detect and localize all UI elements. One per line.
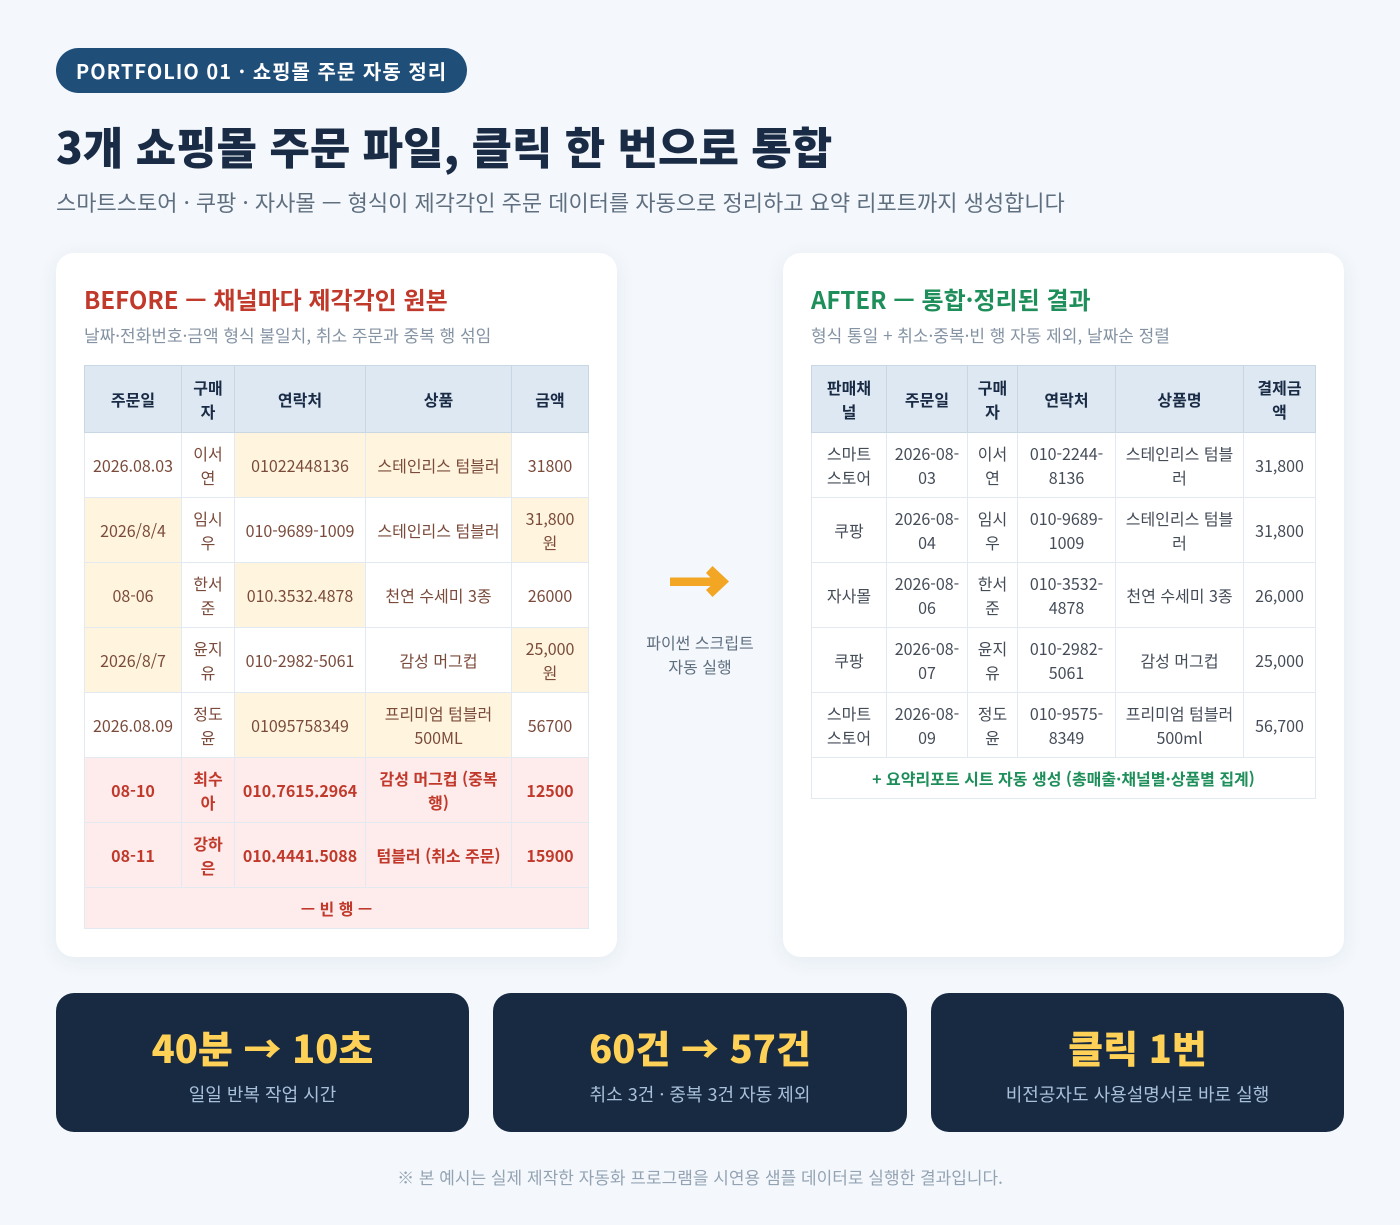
before table: 010-2982-5061 [246,648,354,672]
after table: 010-9575- [1030,701,1103,725]
after table: 상품명 [1157,387,1202,411]
panel: after [783,253,1344,957]
stat card: time [56,993,469,1132]
before table: 08-11 [111,843,155,867]
after table: 결제금 [1257,375,1302,399]
before table: 15900 [526,843,574,867]
before table: 010-9689-1009 [246,518,354,542]
after table: 스마트 [827,701,871,725]
after table: 2026-08- [895,506,959,530]
after table: 주문일 [905,387,949,411]
before table: 31,800 [526,506,574,530]
before table: 010.7615.2964 [243,778,357,802]
after table: 연락처 [1044,387,1089,411]
before table: 01095758349 [251,713,349,737]
after table: 06 [918,595,936,619]
before heading: BEFORE — 채널마다 제각각인 원본 [84,281,448,316]
badge: PORTFOLIO 01 · 쇼핑몰 주문 자동 정리 [76,56,447,85]
after description: 형식 통일 + 취소·중복·빈 행 자동 제외, 날짜순 정렬 [811,322,1170,347]
after table: 04 [918,530,936,554]
after table: 임시우 [978,506,1007,554]
after table: 구매자 [978,375,1007,423]
after table: 정도윤 [978,701,1007,749]
before table: 12500 [526,778,574,802]
badge [56,48,467,93]
before table [84,365,589,929]
before table: 한서준 [193,571,223,619]
before table: 2026.08.03 [93,453,173,477]
after table: 2026-08- [895,636,959,660]
after table: 스마트 [827,441,871,465]
before table: 상품 [424,387,453,411]
before table: 텀블러 (취소 주문) [376,843,501,867]
after table: 천연 수세미 3종 [1126,583,1233,607]
stat value: 60건 → 57건 [589,1019,811,1074]
after table: 56,700 [1255,713,1304,737]
after table: 자사몰 [827,583,871,607]
after table: 09 [918,725,936,749]
after table: 26,000 [1255,583,1304,607]
before table: 감성 머그컵 (중복 행) [379,766,498,814]
arrow caption: 자동 실행 [668,654,732,678]
after table: 감성 머그컵 [1140,648,1219,672]
before table: 천연 수세미 3종 [385,583,492,607]
after table: 2026-08- [895,571,959,595]
after table: 1009 [1049,530,1084,554]
before table: 010.4441.5088 [243,843,357,867]
before table: 스테인리스 텀블러 [377,518,500,542]
after table: 010-9689- [1030,506,1103,530]
before table: 2026/8/4 [100,518,166,542]
before table: 원 [543,530,557,554]
after table: 010-2244- [1030,441,1103,465]
before table: 임시우 [193,506,223,554]
before table: — 빈 행 — [301,896,372,920]
footnote: ※ 본 예시는 실제 제작한 자동화 프로그램을 시연용 샘플 데이터로 실행한 결과입니다. [397,1164,1003,1189]
after table: 8136 [1049,465,1084,489]
before table: 08-06 [112,583,154,607]
arrow caption [646,630,754,678]
before table: 2026/8/7 [100,648,166,672]
before table: 강하은 [193,831,223,879]
before table: 프리미엄 텀블러 500ML [385,701,492,749]
before description: 날짜·전화번호·금액 형식 불일치, 취소 주문과 중복 행 섞임 [84,322,491,347]
after table: 31,800 [1255,518,1304,542]
after table: 판매채 [827,375,871,399]
after table: 스토어 [827,725,871,749]
stat label: 비전공자도 사용설명서로 바로 실행 [1006,1081,1269,1107]
after table: 07 [918,660,936,684]
before table: 56700 [528,713,572,737]
before table: 25,000 [526,636,574,660]
after table: 스토어 [827,465,871,489]
before table: 08-10 [111,778,155,802]
stat value: 40분 → 10초 [152,1019,373,1074]
after table: 쿠팡 [834,518,864,542]
after table: 010-2982- [1030,636,1103,660]
after table: 스테인리스 텀블러 [1126,506,1233,554]
after table: 03 [918,465,936,489]
before table: 윤지유 [193,636,223,684]
stat label: 취소 3건 · 중복 3건 자동 제외 [590,1081,810,1107]
before table: 구매자 [193,375,223,423]
stat card: click [931,993,1344,1132]
title: 3개 쇼핑몰 주문 파일, 클릭 한 번으로 통합 [56,113,832,177]
before table: 스테인리스 텀블러 [377,453,500,477]
before table: 01022448136 [251,453,349,477]
after table: 한서준 [978,571,1007,619]
after table: 25,000 [1255,648,1304,672]
before table: 2026.08.09 [93,713,173,737]
before table: 최수아 [193,766,223,814]
before table: 26000 [528,583,572,607]
after table: 8349 [1049,725,1084,749]
stat card: rows [493,993,907,1132]
arrow [670,566,729,597]
after table: + 요약리포트 시트 자동 생성 (총매출·채널별·상품별 집계) [872,766,1255,790]
before table: 이서연 [193,441,223,489]
after table: 이서연 [978,441,1007,489]
after table: 31,800 [1255,453,1304,477]
before table: 31800 [528,453,572,477]
after table: 4878 [1049,595,1084,619]
after table: 프리미엄 텀블러 500ml [1126,701,1233,749]
before table: 연락처 [278,387,322,411]
before table: 주문일 [111,387,155,411]
after table: 액 [1272,399,1287,423]
panel: before [56,253,617,957]
before table: 010.3532.4878 [247,583,353,607]
stat value: 클릭 1번 [1068,1019,1207,1074]
after table: 2026-08- [895,441,959,465]
after heading: AFTER — 통합·정리된 결과 [811,281,1091,316]
arrow caption: 파이썬 스크립트 [646,630,754,654]
after table: 010-3532- [1030,571,1103,595]
stat label: 일일 반복 작업 시간 [189,1081,336,1107]
after table: 윤지유 [978,636,1007,684]
after table: 2026-08- [895,701,959,725]
after table [811,365,1316,799]
after table: 쿠팡 [834,648,864,672]
before table: 정도윤 [193,701,223,749]
after table: 널 [842,399,856,423]
subtitle: 스마트스토어 · 쿠팡 · 자사몰 — 형식이 제각각인 주문 데이터를 자동으로 정리하고 요약 리포트까지 생성합니다 [56,186,1065,218]
before table: 원 [543,660,557,684]
after table: 스테인리스 텀블러 [1126,441,1233,489]
before table: 금액 [535,387,565,411]
before table: 감성 머그컵 [399,648,478,672]
after table: 5061 [1049,660,1084,684]
